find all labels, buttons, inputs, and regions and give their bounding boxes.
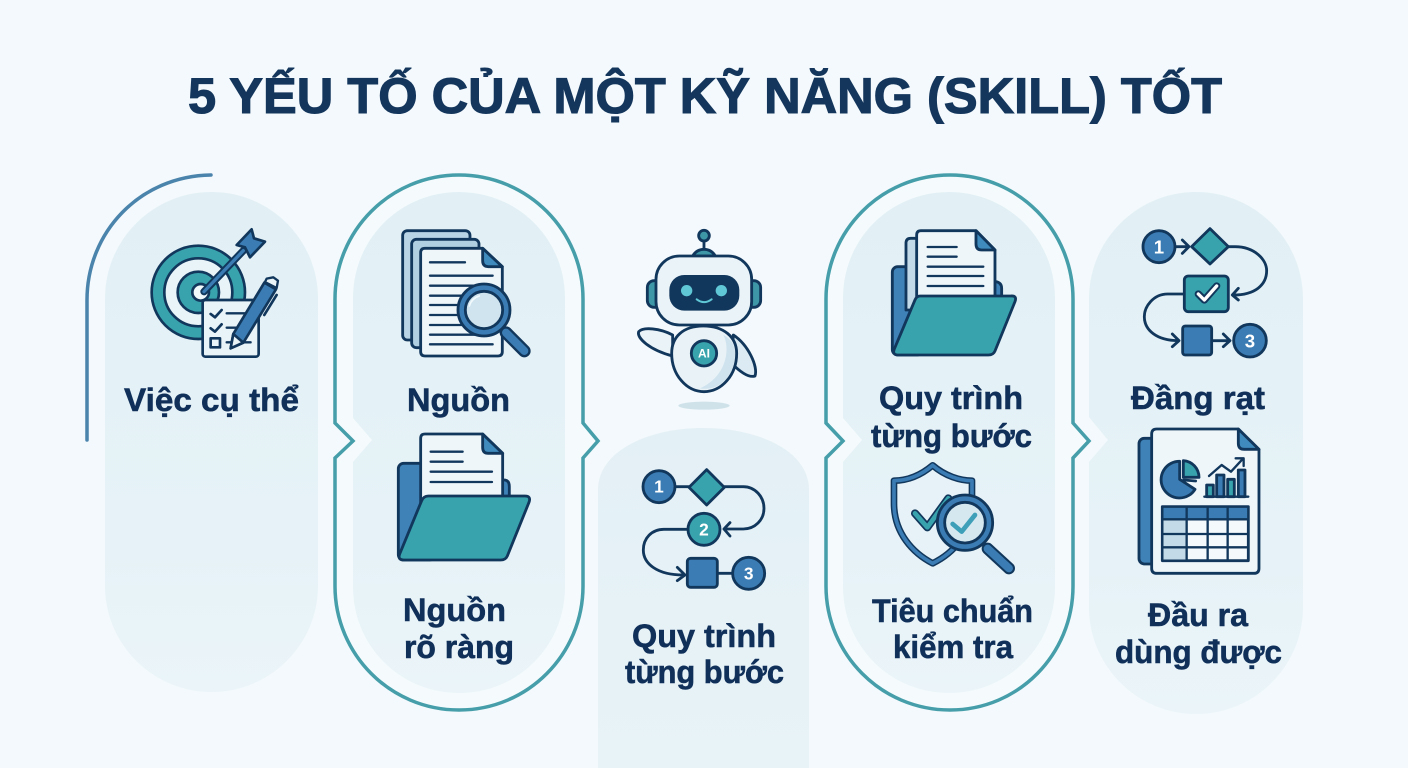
label: nguồn rõ ràng	[403, 592, 514, 665]
label: tiêu chuẩn kiểm tra: kiểm tra	[893, 629, 1013, 665]
icon: shield and magnifier	[894, 465, 1009, 568]
panel background 3	[598, 428, 809, 768]
panel background 1	[105, 192, 318, 692]
icon: numbered process flow	[643, 470, 765, 589]
panel outline 4	[826, 175, 1089, 710]
label: quy trình từng bước	[625, 618, 784, 690]
icon: target and checklist	[152, 229, 278, 357]
label: nguồn rõ ràng: rõ ràng	[404, 629, 514, 665]
icon: open folder	[398, 434, 530, 560]
icon: report document	[1139, 429, 1259, 573]
label: đầng rạt: Đầng rạt	[1131, 380, 1265, 416]
label: nguồn: Nguồn	[407, 382, 510, 418]
panel: việc cụ thể	[87, 175, 318, 692]
panel: quy trình và tiêu chuẩn	[826, 175, 1089, 710]
label: nguồn rõ ràng: Nguồn	[403, 592, 506, 628]
label: tiêu chuẩn kiểm tra: Tiêu chuẩn	[872, 593, 1033, 629]
title: 5 YẾU TỐ CỦA MỘT KỸ NĂNG (SKILL) TỐT	[188, 67, 1222, 124]
label: tiêu chuẩn kiểm tra	[872, 593, 1033, 665]
panel: quy trình từng bước	[598, 428, 809, 768]
panel background 5	[1089, 192, 1303, 714]
icon: folder with document	[892, 231, 1016, 355]
label: việc cụ thể: Việc cụ thể	[124, 382, 299, 418]
icon: workflow with check: 1	[1154, 236, 1164, 257]
icon: numbered process flow: 3	[744, 563, 754, 583]
label: quy trình từng bước 2: Quy trình	[879, 380, 1023, 416]
panel: nguồn	[335, 175, 598, 710]
label: quy trình từng bước 2: từng bước	[871, 418, 1032, 454]
icon: documents and magnifier	[403, 231, 524, 356]
panel: đầu ra	[1089, 192, 1303, 714]
label: quy trình từng bước: Quy trình	[632, 618, 776, 654]
label: đầu ra dùng được	[1115, 597, 1282, 670]
panel background 4	[843, 192, 1055, 693]
robot mascot	[638, 230, 761, 410]
label: quy trình từng bước 2	[871, 380, 1032, 454]
icon: workflow with check	[1143, 229, 1267, 357]
label: đầu ra dùng được: Đầu ra	[1148, 597, 1248, 633]
robot mascot: AI	[698, 347, 710, 361]
icon: numbered process flow: 1	[654, 477, 664, 497]
icon: workflow with check: 3	[1245, 330, 1255, 351]
arc outline 1	[87, 175, 211, 440]
panel background 2	[353, 192, 565, 693]
label: đầu ra dùng được: dùng được	[1115, 634, 1282, 670]
panel outline 2	[335, 175, 598, 710]
label: quy trình từng bước: từng bước	[625, 654, 784, 690]
icon: numbered process flow: 2	[699, 519, 709, 539]
